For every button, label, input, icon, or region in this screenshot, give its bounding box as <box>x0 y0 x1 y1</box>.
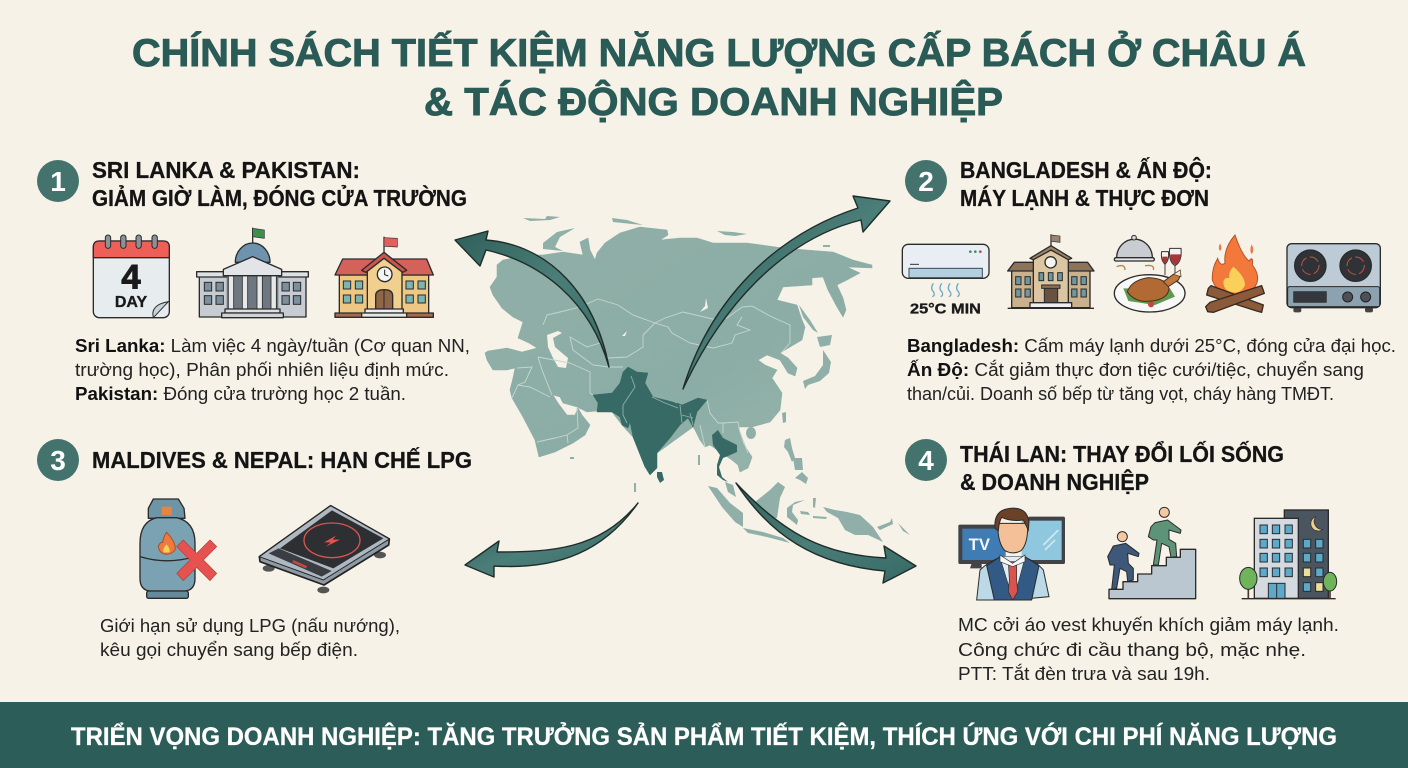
heading 4 <box>960 440 1284 495</box>
text: Bangladesh & India: Ấn Độ: Cắt giảm thực đơn tiệc cưới/tiệc, chuyển sang <box>907 359 1364 380</box>
heading 2: BANGLADESH & ẤN ĐỘ: <box>960 156 1212 183</box>
icon: school <box>335 237 433 317</box>
heading 1: SRI LANKA & PAKISTAN: <box>92 157 360 183</box>
badge 3 <box>37 439 79 481</box>
panel: Sri Lanka & Pakistan <box>37 157 470 404</box>
title: & TÁC ĐỘNG DOANH NGHIỆP <box>424 79 1003 124</box>
text: Bangladesh & India: than/củi. Doanh số bếp từ tăng vọt, cháy hàng TMĐT. <box>907 383 1334 404</box>
icon: 4 day calendar: 4 <box>121 258 141 296</box>
bottom banner: TRIỂN VỌNG DOANH NGHIỆP: TĂNG TRƯỞNG SẢN PHẨM TIẾT KIỆM, THÍCH ỨNG VỚI CHI PHÍ NĂNG LƯỢNG <box>71 721 1337 751</box>
icon: induction cooktop <box>259 506 389 593</box>
bottom banner <box>0 702 1408 768</box>
badge 4: 4 <box>918 445 934 476</box>
panel: Bangladesh & India <box>902 156 1396 404</box>
arrow: Bangladesh & India <box>683 196 890 389</box>
icon: campfire <box>1206 235 1264 312</box>
icon: air conditioner: 25°C MIN <box>910 301 981 318</box>
map: Thailand <box>712 430 737 482</box>
text: Sri Lanka & Pakistan: trường học), Phân phối nhiên liệu định mức. <box>75 359 449 380</box>
badge 1 <box>37 160 79 202</box>
badge 1: 1 <box>50 166 66 197</box>
icon: TV presenter <box>958 508 1065 600</box>
icon: electric hob <box>1287 244 1380 312</box>
icon: banquet food <box>1114 235 1185 312</box>
heading 2 <box>960 156 1212 211</box>
heading 4: THÁI LAN: THAY ĐỔI LỐI SỐNG <box>960 440 1284 467</box>
map: country borders <box>512 299 790 453</box>
arrow: Maldives & Nepal <box>465 503 638 577</box>
heading 3: MALDIVES & NEPAL: HẠN CHẾ LPG <box>92 446 472 473</box>
text: Sri Lanka & Pakistan: Pakistan: Đóng cửa trường học 2 tuần. <box>75 383 406 404</box>
title <box>132 31 1306 124</box>
map: South Asia highlighted <box>593 367 707 475</box>
text: Sri Lanka & Pakistan <box>75 335 470 404</box>
badge 2: 2 <box>918 166 934 197</box>
heading 4: & DOANH NGHIỆP <box>960 468 1149 495</box>
badge 4 <box>905 439 947 481</box>
icon: 4 day calendar <box>93 235 169 318</box>
text: Bangladesh & India <box>907 335 1396 404</box>
heading 1: GIẢM GIỜ LÀM, ĐÓNG CỬA TRƯỜNG <box>92 183 467 211</box>
title: CHÍNH SÁCH TIẾT KIỆM NĂNG LƯỢNG CẤP BÁCH Ở CHÂU Á <box>132 31 1306 75</box>
heading 2: MÁY LẠNH & THỰC ĐƠN <box>960 184 1209 211</box>
arrow: Thailand <box>736 483 916 583</box>
icon: LPG cylinder crossed <box>140 499 217 598</box>
icon: government building <box>197 228 308 318</box>
text: Thailand: MC cởi áo vest khuyến khích giảm máy lạnh. <box>958 614 1339 635</box>
map: highlighted country borders <box>623 376 693 425</box>
map: Eurasia landmass <box>485 227 872 472</box>
map: Sri Lanka <box>657 472 664 483</box>
text: Maldives & Nepal: Giới hạn sử dụng LPG (nấu nướng), <box>100 615 400 636</box>
icon: TV presenter: TV <box>969 535 990 554</box>
icon: air conditioner <box>902 244 989 318</box>
text: Maldives & Nepal <box>100 615 400 660</box>
panel: Thailand <box>905 439 1339 684</box>
panel: Maldives & Nepal <box>37 439 472 660</box>
map of Asia <box>485 216 910 543</box>
icon: 4 day calendar: DAY <box>115 294 147 311</box>
map: Caspian Sea <box>547 331 568 368</box>
icon: office building at night <box>1240 510 1337 599</box>
icon: university <box>1008 234 1094 308</box>
map: islands <box>523 216 910 543</box>
text: Bangladesh & India: Bangladesh: Cấm máy lạnh dưới 25°C, đóng cửa đại học. <box>907 335 1396 356</box>
arrow: Sri Lanka & Pakistan <box>455 231 609 367</box>
heading 1 <box>92 157 467 211</box>
map: crescent lake Baikal <box>700 298 708 312</box>
text: Thailand: PTT: Tắt đèn trưa và sau 19h. <box>958 663 1210 684</box>
badge 2 <box>905 160 947 202</box>
icon: people climbing stairs <box>1108 507 1196 599</box>
badge 3: 3 <box>50 445 66 476</box>
text: Thailand <box>958 614 1339 684</box>
text: Thailand: Công chức đi cầu thang bộ, mặc nhẹ. <box>958 639 1306 660</box>
text: Sri Lanka & Pakistan: Sri Lanka: Làm việc 4 ngày/tuần (Cơ quan NN, <box>75 335 470 356</box>
text: Maldives & Nepal: kêu gọi chuyển sang bếp điện. <box>100 639 358 660</box>
